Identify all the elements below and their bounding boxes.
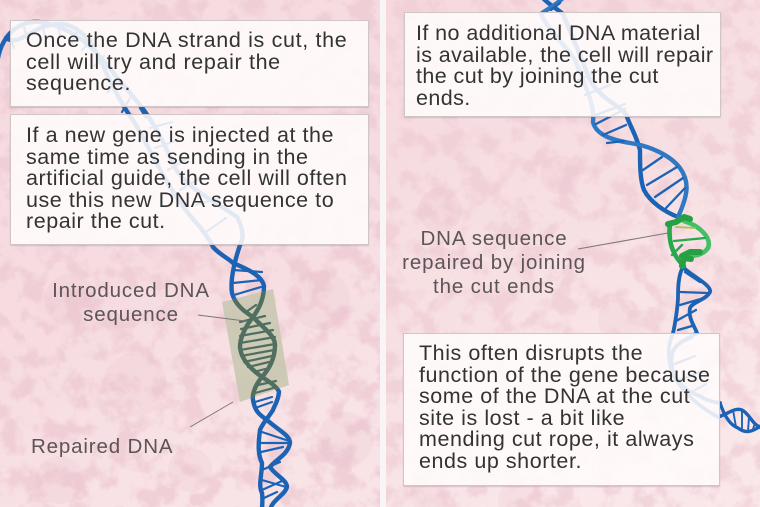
text: no additional DNA [416, 21, 714, 110]
leader line: repaired DNA [190, 402, 233, 427]
text: disrupts gene: some of the DNA at the cut [419, 384, 690, 408]
introduced DNA patch [222, 289, 289, 402]
label: repaired DNA: Repaired DNA [31, 435, 173, 458]
text: disrupts gene: This often disrupts the [419, 341, 643, 365]
text: no additional DNA: the cut by joining the cut [416, 64, 659, 88]
label: joined cut ends: repaired by joining [402, 251, 586, 274]
text: new gene: artificial guide, the cell will often [26, 166, 348, 190]
label: introduced DNA sequence [52, 279, 210, 326]
text: no additional DNA: ends. [416, 86, 471, 110]
text box: no additional DNA [404, 12, 721, 117]
text: new gene: If a new gene is injected at the [26, 123, 334, 147]
leader line: introduced DNA [198, 315, 245, 321]
text: disrupts gene: function of the gene because [419, 362, 711, 386]
DNA helix: right tail [718, 403, 760, 432]
text: cut intro: Once the DNA strand is cut, the [26, 28, 347, 52]
text: cut intro: cell will try and repair the [26, 50, 281, 74]
text box: disrupts gene [403, 333, 720, 486]
panel: right background [386, 0, 760, 507]
text box: DNA strand cut [10, 20, 369, 107]
text: no additional DNA: is available, the cell will repair [416, 42, 714, 66]
text: disrupts gene: ends up shorter. [419, 448, 582, 472]
text: new gene: use this new DNA sequence to [26, 188, 334, 212]
text: cut intro [26, 28, 347, 95]
text: disrupts gene: mending cut rope, it always [419, 427, 694, 451]
DNA helix: right [541, 0, 720, 417]
text: cut intro: sequence. [26, 71, 131, 95]
text: disrupts gene [419, 341, 711, 472]
label: joined cut ends: DNA sequence [421, 227, 567, 250]
text box: new gene injected [10, 114, 369, 245]
text: new gene: repair the cut. [26, 209, 166, 233]
text: new gene [26, 123, 348, 233]
divider between panels [380, 0, 386, 507]
DNA helix: left [0, 22, 290, 507]
label: introduced DNA sequence: Introduced DNA [52, 279, 210, 302]
label: joined cut ends [402, 227, 586, 298]
label: joined cut ends: the cut ends [433, 275, 555, 298]
label: introduced DNA sequence: sequence [83, 303, 179, 326]
panel: left background [0, 0, 380, 507]
text: no additional DNA: If no additional DNA material [416, 21, 701, 45]
leader line: joined ends [578, 233, 668, 249]
text: new gene: same time as sending in the [26, 144, 309, 168]
repaired green DNA [668, 217, 709, 266]
text: disrupts gene: site is lost - a bit like [419, 406, 625, 430]
